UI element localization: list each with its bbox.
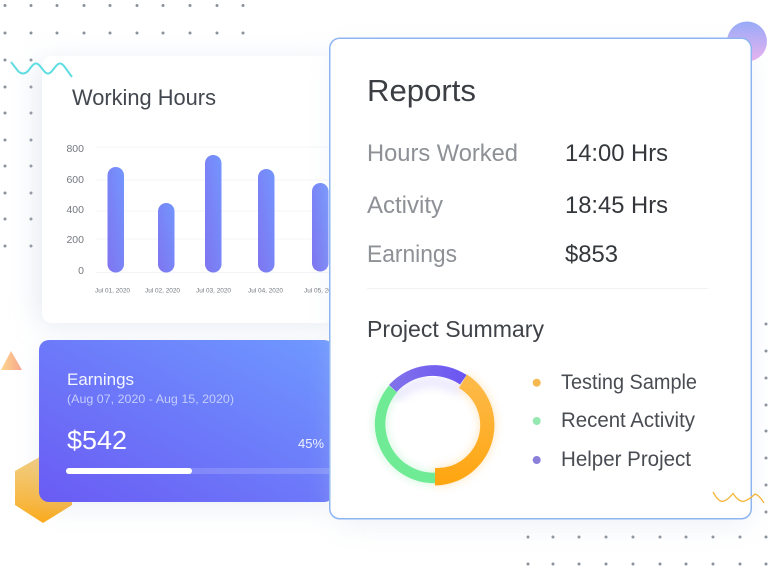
dot pattern: bottom right [526, 322, 768, 566]
stat: hours worked [367, 140, 668, 167]
stat: activity: 18:45 Hrs [565, 192, 668, 219]
stat: earnings: Earnings [367, 241, 457, 268]
heading: project summary: Project Summary [367, 316, 545, 342]
earnings heading: Earnings [67, 371, 134, 389]
heading: reports: Reports [367, 73, 476, 108]
panel: earnings [39, 340, 334, 506]
panel: working hours [38, 56, 340, 324]
stat: activity: Activity [367, 192, 443, 219]
chart: working hours bars: Jul 03, 2020 [196, 288, 232, 294]
chart: working hours bars: 800 [66, 143, 84, 155]
decorative circle: top right [727, 22, 767, 62]
chart: working hours bars: Jul 05, 2020 [304, 288, 340, 294]
legend: Testing Sample [561, 371, 697, 394]
chart: working hours bars: Jul 02, 2020 [145, 288, 181, 294]
decorative wave: orange [713, 492, 764, 503]
progress bar [66, 468, 334, 474]
donut chart [380, 365, 494, 486]
legend: Helper Project [561, 448, 691, 471]
stat: earnings: $853 [565, 241, 618, 268]
legend: Recent Activity [561, 409, 695, 432]
chart: working hours bars: Jul 04, 2020 [248, 288, 284, 294]
chart: working hours bars: Jul 01, 2020 [95, 288, 131, 294]
chart: working hours bars: 400 [66, 204, 84, 216]
chart: working hours bars: 200 [66, 234, 84, 246]
stat: activity [367, 192, 668, 219]
decorative hexagon [15, 455, 72, 523]
earnings percentage: 45% [298, 436, 324, 451]
stat: earnings [367, 241, 618, 268]
stat: hours worked: 14:00 Hrs [565, 140, 668, 167]
heading: working hours: Working Hours [72, 85, 216, 110]
decorative triangle [1, 351, 22, 370]
chart: working hours bars: 0 [78, 265, 84, 277]
earnings amount: $542 [67, 425, 127, 455]
chart: working hours bars [66, 143, 340, 294]
chart: working hours bars: 600 [66, 174, 84, 186]
earnings date range: (Aug 07, 2020 - Aug 15, 2020) [67, 392, 234, 406]
dot pattern: top left [4, 4, 244, 248]
stat: hours worked: Hours Worked [367, 140, 518, 167]
decorative wave: teal [11, 62, 72, 77]
legend [533, 371, 697, 471]
panel: reports [330, 38, 751, 524]
